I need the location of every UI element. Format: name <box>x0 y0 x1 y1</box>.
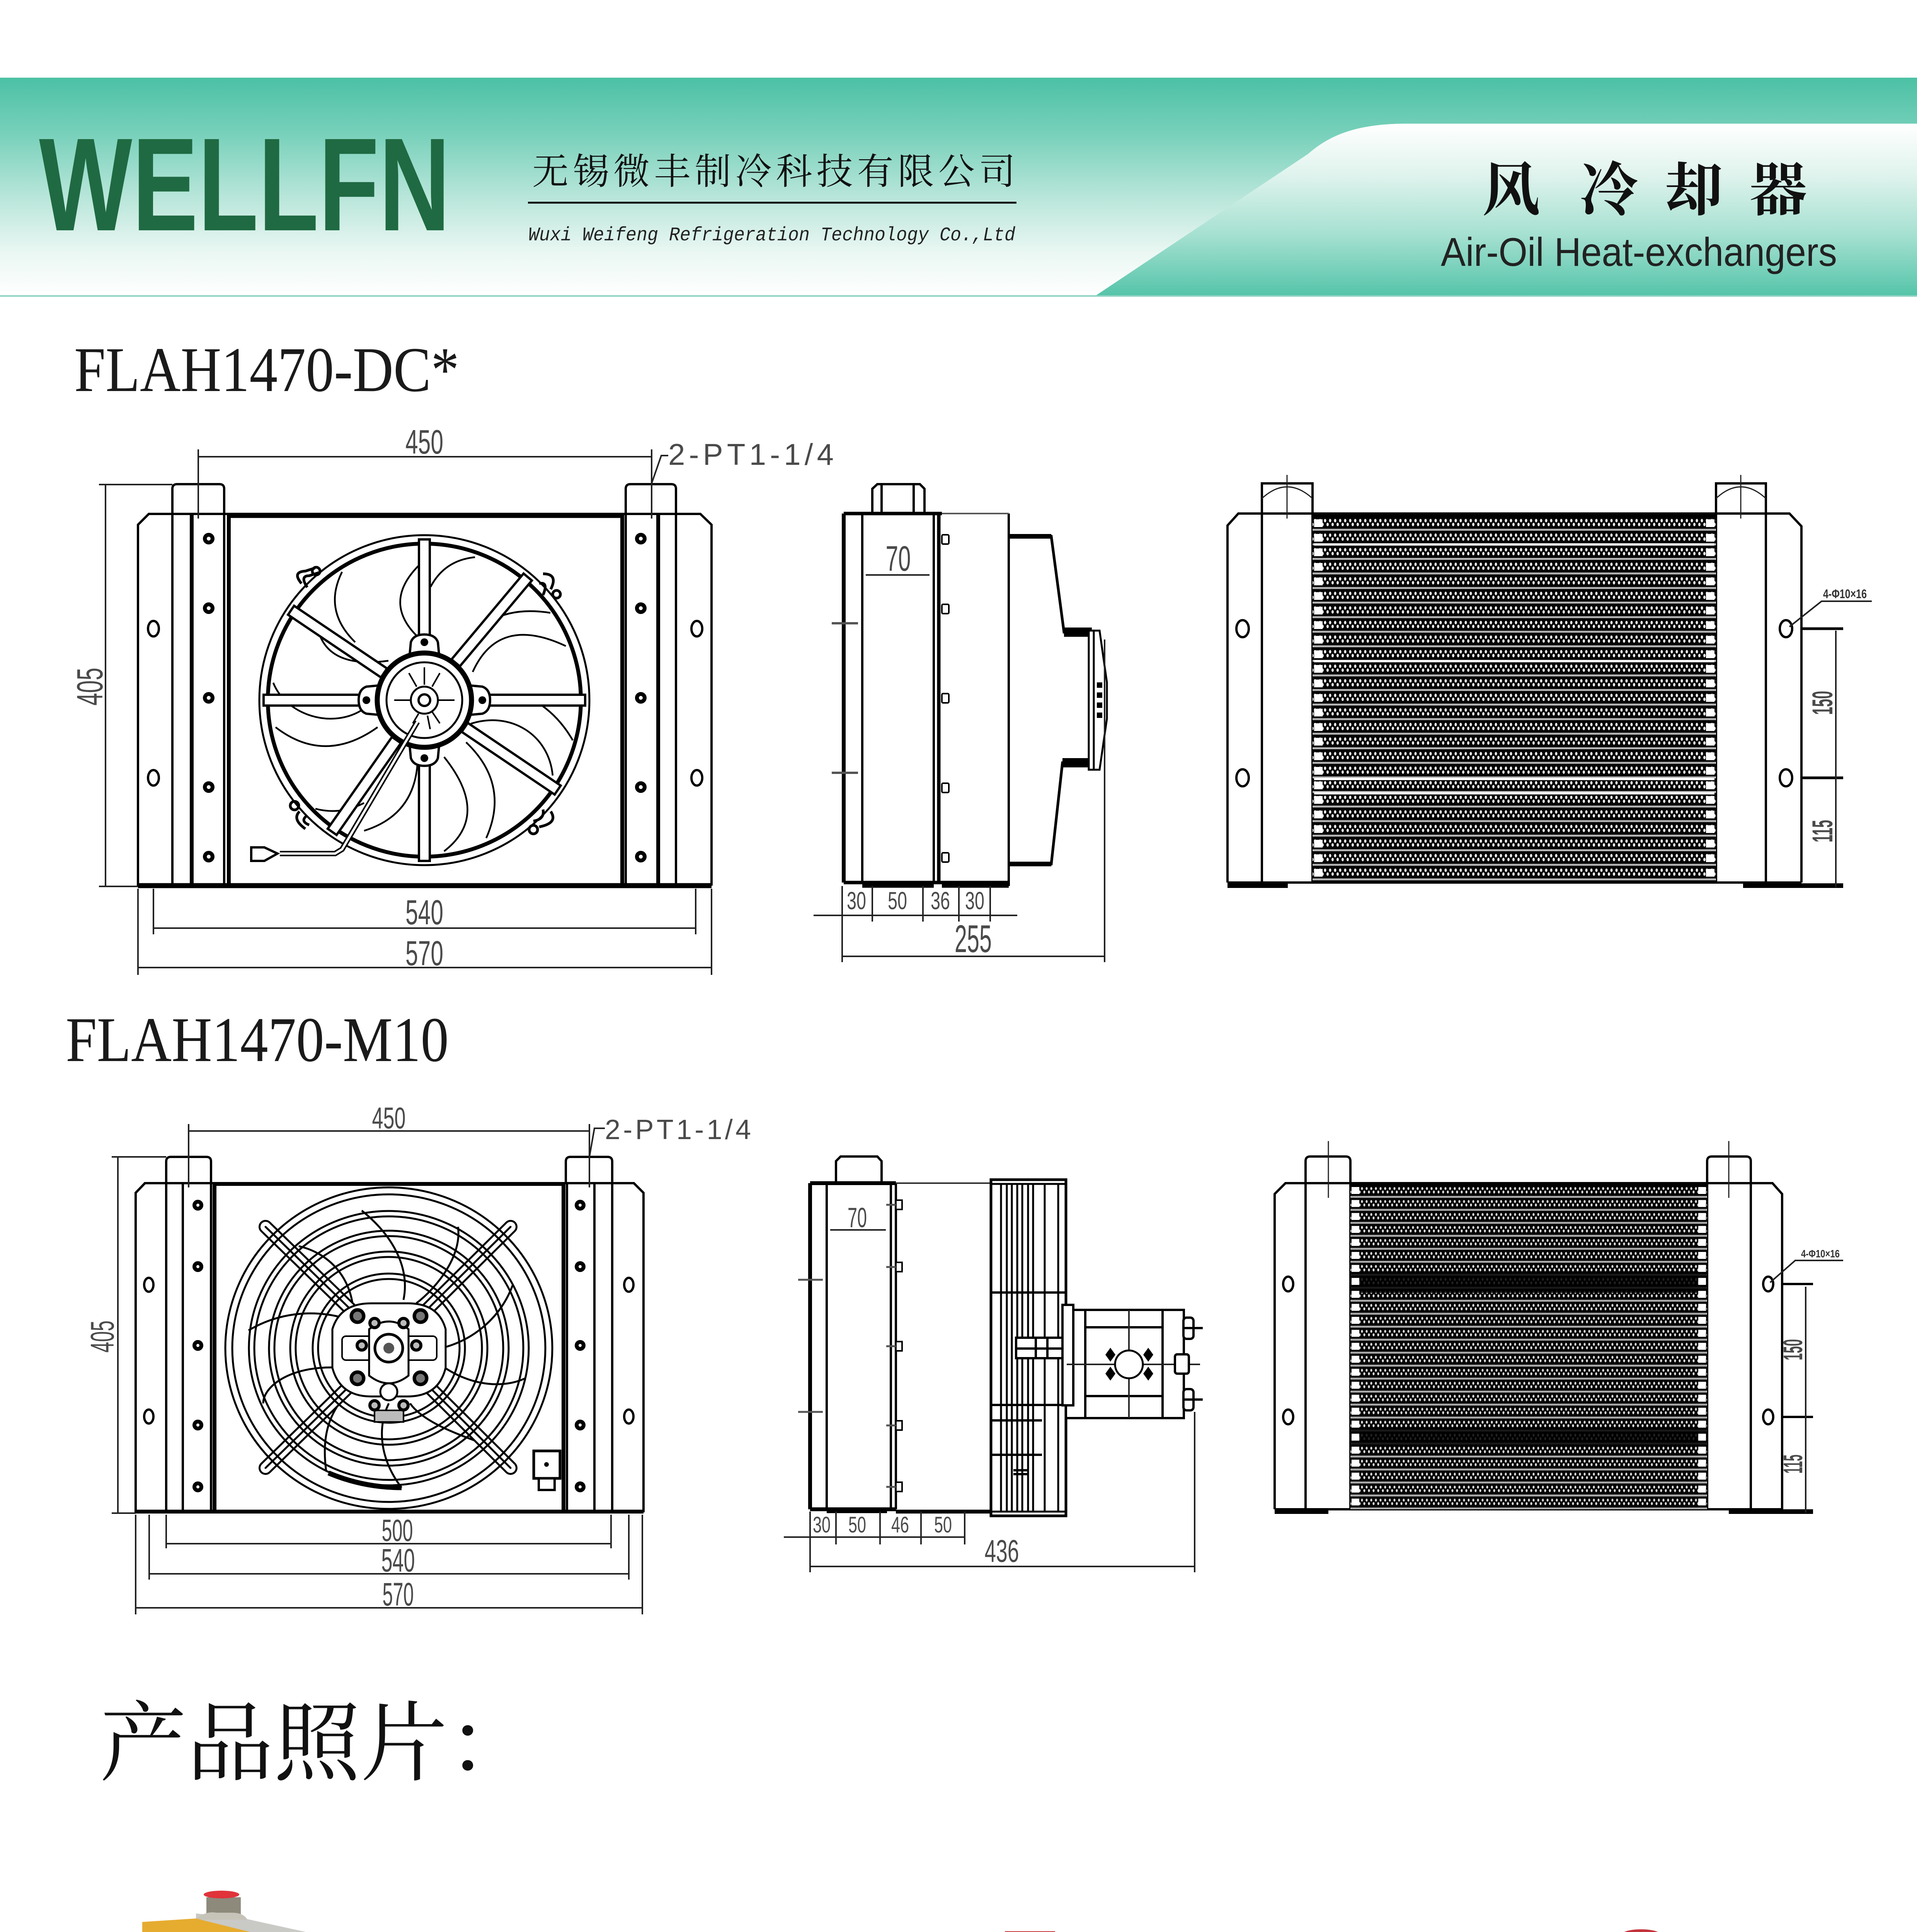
icon: fan guard <box>75 1918 339 1932</box>
heading: FLAH1470-DC*: FLAH1470-DC* <box>74 334 459 405</box>
header right swoosh panel <box>1095 124 1917 296</box>
dimension 30: 30 <box>813 1512 831 1537</box>
fan motor <box>1089 631 1107 770</box>
dimension 450: 450 <box>405 423 443 461</box>
company name Chinese: 无锡微丰制冷科技有限公司 <box>532 152 1015 192</box>
bracket slots <box>1283 1277 1773 1424</box>
heading: FLAH1470-M10: FLAH1470-M10 <box>66 1004 449 1075</box>
side studs <box>942 535 949 862</box>
dimension 405: 405 <box>84 1321 121 1352</box>
dimension 405: 405 <box>70 668 111 706</box>
dimension 36: 36 <box>931 887 950 915</box>
bracket slots <box>1236 620 1792 786</box>
yellow body <box>142 1918 389 1932</box>
dimension 540: 540 <box>405 893 443 932</box>
dimension 540: 540 <box>381 1542 415 1578</box>
dimension 570: 570 <box>383 1576 414 1612</box>
aluminium top <box>196 1913 410 1932</box>
fan cable and connector <box>251 722 417 861</box>
icon: hydraulic motor <box>332 1303 446 1422</box>
dimension 50 right: 50 <box>934 1512 952 1537</box>
label 4-Φ10×16: 4-Φ10×16 <box>1801 1248 1840 1260</box>
drawing: front view hydraulic motor fan <box>84 1101 751 1614</box>
drawing: rear view hydraulic motor fan: 150 <box>1778 1339 1808 1360</box>
fin core <box>1350 1183 1707 1509</box>
logo WELLFN: WELLFN <box>39 110 450 259</box>
shaft <box>1016 1338 1073 1358</box>
inlet port right <box>1003 1931 1059 1932</box>
solenoid box <box>534 1451 560 1490</box>
header banner <box>0 78 1917 297</box>
label 2-PT1-1/4: 2-PT1-1/4 <box>605 1114 751 1145</box>
dimension 30: 30 <box>847 887 866 915</box>
mounting holes <box>205 535 645 861</box>
product name Chinese: 风冷却器 <box>1482 159 1807 223</box>
company name English: Wuxi Weifeng Refrigeration Technology Co.,Ltd <box>528 224 1015 247</box>
fan shroud <box>1009 536 1089 864</box>
inlet port right <box>1612 1929 1670 1932</box>
dimension 30 right: 30 <box>965 887 984 915</box>
dimension 50: 50 <box>848 1512 866 1537</box>
drawing: rear view DC fan: 115 <box>1806 820 1839 842</box>
drawing: side view DC fan <box>814 484 1107 962</box>
label 2-PT1-1/4: 2-PT1-1/4 <box>668 437 834 471</box>
fan guard side <box>991 1180 1066 1516</box>
drawing: side view hydraulic motor fan <box>784 1156 1203 1572</box>
inlet port left <box>195 1891 247 1920</box>
dimension 570: 570 <box>405 934 443 973</box>
heading: product photos: 产品照片： <box>100 1696 535 1793</box>
drawing: rear view hydraulic motor fan <box>1275 1141 1843 1513</box>
icon: fan blades <box>249 1211 525 1488</box>
photo 2: yellow cooler with DC fan and cable <box>702 1931 1107 1932</box>
product name English: Air-Oil Heat-exchangers <box>1441 230 1837 275</box>
drawing: rear view DC fan <box>1227 475 1872 887</box>
label 4-Φ10×16: 4-Φ10×16 <box>1823 587 1867 601</box>
bracket slots <box>144 1278 633 1423</box>
photo 1: yellow cooler with wire fan guard <box>75 1891 510 1932</box>
side studs <box>896 1200 902 1492</box>
icon: fan guard rings <box>225 1187 552 1509</box>
dimension 436: 436 <box>985 1534 1019 1569</box>
icon: fan blades <box>273 557 573 851</box>
dimension 500: 500 <box>382 1513 413 1548</box>
dimension 450: 450 <box>372 1101 406 1135</box>
icon: fan guard arms <box>266 1227 511 1468</box>
dimension 50: 50 <box>888 887 907 915</box>
fan clips <box>290 567 560 834</box>
dimension 70: 70 <box>848 1202 867 1233</box>
icon: axial fan frame <box>259 535 589 865</box>
dimension 255: 255 <box>955 917 992 961</box>
dimension 46: 46 <box>891 1512 909 1537</box>
dimension 70: 70 <box>886 539 911 578</box>
drawing: front view DC fan <box>70 423 834 975</box>
fin core <box>1313 514 1716 883</box>
mounting holes <box>194 1202 584 1490</box>
drawing: rear view hydraulic motor fan: 115 <box>1778 1454 1808 1474</box>
photo 3: yellow cooler with hydraulic pump <box>1279 1929 1794 1932</box>
dimension 150: 150 <box>1806 691 1839 715</box>
hydraulic pump side <box>1062 1305 1203 1418</box>
bracket slots <box>148 621 702 786</box>
company underline <box>528 202 1016 204</box>
